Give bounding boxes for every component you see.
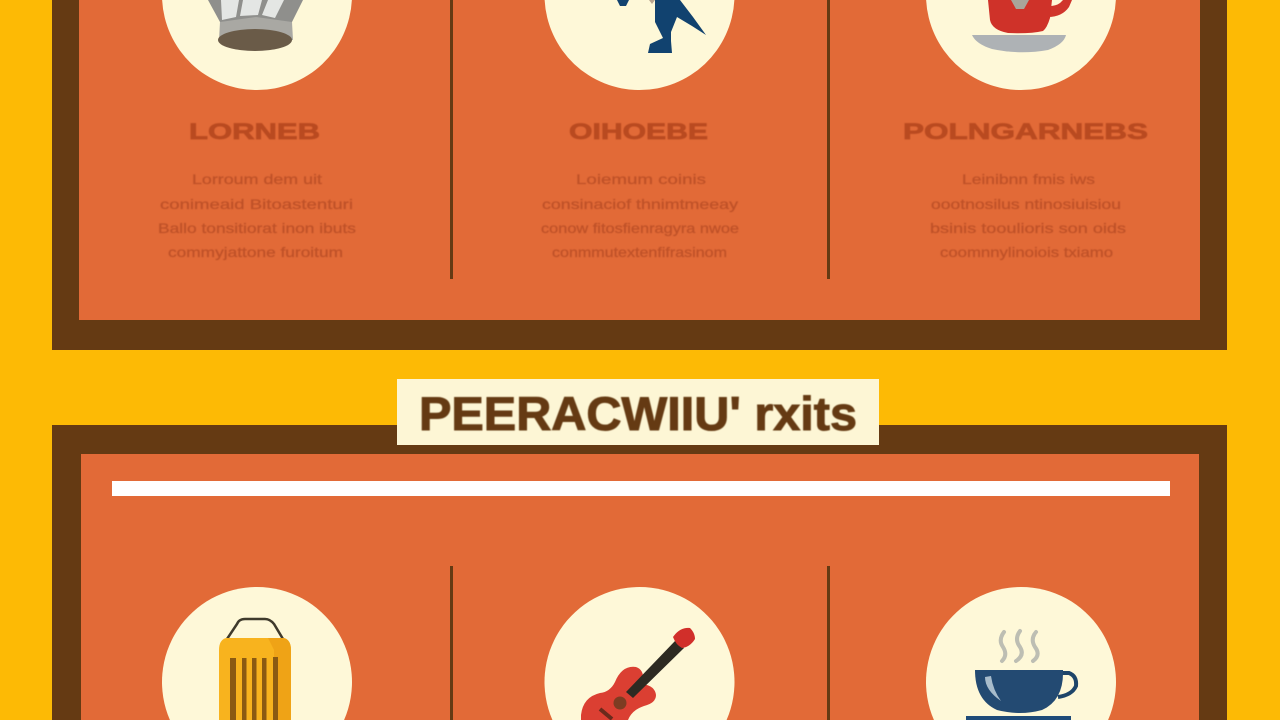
text: column 1 body: Ballo tonsitiorat inon ibuts (158, 220, 356, 236)
text: column 1 body (158, 171, 356, 260)
title banner (397, 379, 879, 445)
icon: lantern (162, 587, 352, 720)
panel: bottom features (52, 425, 1227, 720)
icon: guitar (544, 587, 734, 720)
title: PEERACWIIU' rxits (419, 387, 857, 440)
panel frame: top (52, 0, 1227, 350)
text: column 2 body: Loiemum coinis (576, 171, 706, 187)
panel: top features (52, 0, 1227, 350)
icon: coffee cup (926, 587, 1116, 720)
text: column 2 body (541, 171, 739, 260)
text: column 1 body: commyjattone furoitum (168, 244, 343, 260)
text: column 2 body: conmmutextenfifrasinom (552, 244, 727, 260)
heading: column 3: POLNGARNEBS (903, 119, 1148, 144)
panel fill: bottom (81, 454, 1199, 720)
heading: column 1: LORNEB (189, 119, 320, 144)
text: column 3 body: Leinibnn fmis iws (962, 171, 1095, 187)
column: red mug (903, 0, 1148, 260)
icon: running figure (545, 0, 734, 90)
white rule (112, 481, 1170, 496)
text: column 2 body: consinaciof thnimtmeeay (542, 196, 738, 212)
icon: chef hat (162, 0, 352, 90)
panel fill: top (79, 0, 1200, 320)
text: column 3 body: oootnosilus ntinosiuisiou (931, 196, 1121, 212)
text: column 1 body: Lorroum dem uit (192, 171, 322, 187)
text: column 1 body: conimeaid Bitoastenturi (160, 196, 353, 212)
panel frame: bottom (52, 425, 1227, 720)
text: column 2 body: conow fitosfienragyra nwoe (541, 220, 739, 236)
column: figure (541, 0, 739, 260)
text: column 3 body (930, 171, 1126, 260)
heading: column 2: OIHOEBE (569, 119, 708, 144)
text: column 3 body: bsinis tooulioris son oids (930, 220, 1126, 236)
icon: red mug (926, 0, 1116, 90)
text: column 3 body: coomnnylinoiois txiamo (940, 244, 1113, 260)
column: chef hat (158, 0, 356, 260)
